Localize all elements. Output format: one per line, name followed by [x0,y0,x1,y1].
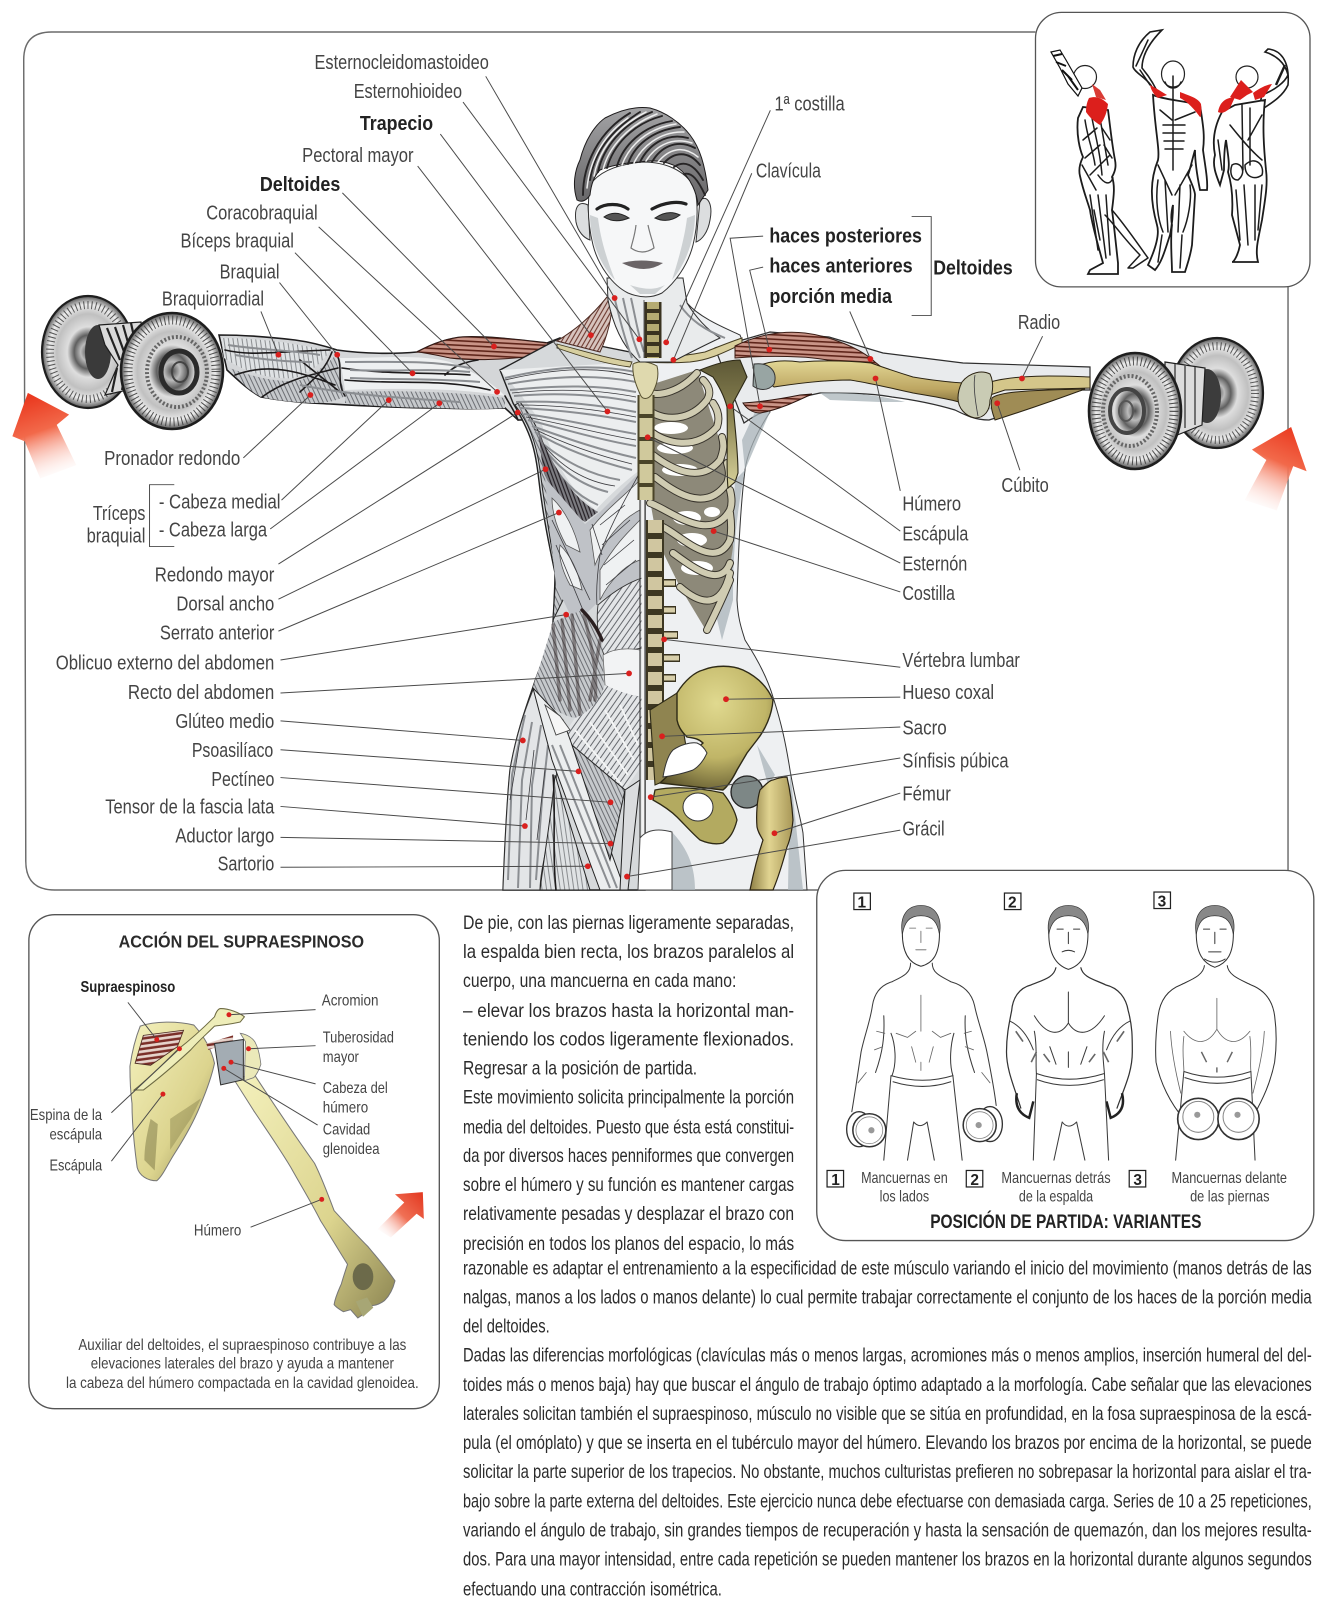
pectoral [500,362,640,510]
text block: exercise description: relativamente pesadas y desplazar el brazo con [463,1204,794,1225]
text block: exercise description: la espalda bien recta, los brazos paralelos al [463,942,794,963]
label: Tuberosidad mayor [246,1030,394,1066]
label: Pronador redondo: Pronador redondo [104,447,240,470]
skeleton: spine and sternum [633,362,680,780]
label: Dorsal ancho [176,466,548,616]
man 1: dumbbells at the sides [847,905,1002,1160]
text block: exercise description: Regresar a la posición de partida. [463,1059,697,1080]
skin of right torso and leg [640,280,807,890]
label: Supraespinoso [80,979,175,1042]
label: Esternón: Esternón [902,552,967,575]
label: Esternocleidomastoideo [315,51,618,301]
label: Esternón [645,434,967,575]
label: Cabeza larga: - Cabeza larga [159,518,268,541]
label: Bíceps braquial [180,230,415,376]
label: Cabeza medial: - Cabeza medial [159,490,280,513]
label: Grácil: Grácil [902,817,945,840]
panel: main anatomy frame [24,32,1288,890]
hair [574,107,708,205]
label: Pectoral mayor [302,144,610,414]
ears [576,198,711,242]
text block: exercise description: De pie, con las piernas ligeramente separadas, [463,913,794,934]
label: Recto del abdomen [128,671,632,704]
skeleton: ribcage [650,370,733,632]
text block: exercise description: – elevar los brazos hasta la horizontal man- [463,1001,794,1022]
label: Escápula [727,403,969,545]
label: Sartorio [218,852,591,875]
text block: exercise description: sobre el húmero y su función es mantener cargas [463,1175,794,1196]
label: Húmero [194,1197,324,1239]
label: Glúteo medio: Glúteo medio [175,710,274,733]
sartorius band [533,688,625,890]
label: Cabeza del húmero: húmero [323,1100,368,1117]
label: Glúteo medio [175,710,526,743]
inset figure: side view [1051,50,1148,274]
label: Fémur: Fémur [902,782,951,805]
label: haces posteriores [730,224,922,409]
number box 3 [1154,892,1170,910]
label: Escápula [50,1092,165,1174]
number box 1 [854,893,870,912]
number box 2: 2 [1008,895,1017,912]
legend 1: Mancuernas en los lados [827,1170,948,1205]
skeleton: femur [731,776,793,890]
label: Húmero [873,376,961,515]
label: Cavidad glenoidea [221,1066,380,1158]
heading: acción del supraespinoso: ACCIÓN DEL SUPRAESPINOSO [119,931,364,952]
dumbbell: left [42,296,223,429]
skin shadows [670,393,1040,890]
skeleton: pelvis [650,666,773,844]
label: Cabeza larga [159,400,442,541]
label: Aductor largo [175,825,613,848]
neck muscles and cervical spine [615,298,725,358]
label: Serrato anterior: Serrato anterior [160,621,274,644]
label: Espina de la escápula: Espina de la [30,1107,102,1124]
label: Deltoides bracket: Deltoides [933,256,1013,279]
panel: muscles involved inset [1036,12,1310,287]
skin of right arm [715,332,1090,423]
arrow: abduction direction [377,1192,424,1238]
label: Coracobraquial: Coracobraquial [206,202,318,225]
external oblique [533,610,604,718]
arrow: left lift direction [12,393,76,478]
label: haces anteriores: haces anteriores [769,254,913,277]
label: Espina de la escápula [30,1046,182,1144]
left arm muscles [219,335,600,420]
label: Oblicuo externo del abdomen: Oblicuo externo del abdomen [56,651,274,674]
caption: elevaciones laterales del brazo y ayuda a mantener [91,1355,395,1372]
label: Sínfisis púbica [648,749,1009,800]
legend 3: Mancuernas delante de las piernas [1129,1170,1287,1205]
number box 3: 3 [1158,893,1167,910]
label: Supraespinoso: Supraespinoso [80,979,175,996]
label: Redondo mayor [155,410,521,587]
lips [622,260,663,269]
rectus abdominis [597,578,642,655]
heading: posición de partida variantes: POSICIÓN DE PARTIDA: VARIANTES [930,1209,1201,1233]
text block: exercise description: da por diversos haces penniformes que convergen [463,1146,794,1167]
label: porción media: porción media [769,285,892,308]
dumbbell: right [1089,338,1263,469]
eyes [604,213,680,221]
dark lower pectoral edge [538,430,598,522]
label: Vértebra lumbar: Vértebra lumbar [902,649,1020,672]
labels: left column [56,51,642,875]
label: Costilla: Costilla [902,582,955,605]
label: Sínfisis púbica: Sínfisis púbica [902,749,1009,772]
arrow: right lift direction [1245,427,1307,510]
head [574,107,711,297]
label: Escápula: Escápula [50,1157,102,1174]
label: 1ª costilla: 1ª costilla [774,92,845,115]
label: Acromion: Acromion [322,992,378,1009]
serratus and upper abdomen [545,472,640,625]
label: Tríceps braquial bracket [87,485,174,547]
label: Deltoides: Deltoides [260,173,340,196]
white gap between the legs [638,830,672,890]
label: Deltoides bracket [912,217,1013,316]
text block: exercise description: media del deltoides. Puesto que ésta está constitui- [463,1117,794,1138]
label: Pectíneo: Pectíneo [211,768,274,791]
panel: acción del supraespinoso [29,915,439,1409]
text block: exercise description: del deltoides. [463,1316,550,1337]
man 3: dumbbells in front of legs [1156,905,1276,1160]
text block: exercise description: teniendo los codos ligeramente flexionados. [463,1030,794,1051]
label: Sacro [659,716,947,739]
label: Cúbito: Cúbito [1001,474,1049,497]
label: Psoasilíaco: Psoasilíaco [192,739,273,762]
lower deltoid fibres [743,394,812,413]
label: Pectoral mayor: Pectoral mayor [302,144,414,167]
legend 2: Mancuernas detrás de la espalda: de la espalda [1019,1188,1093,1205]
label: Braquial [220,260,340,358]
label: Esternohioideo [354,80,642,342]
label: Esternocleidomastoideo: Esternocleidomastoideo [315,51,489,74]
number box 2 [1004,893,1021,912]
label: Sartorio: Sartorio [218,852,274,875]
label: Serrato anterior [160,510,562,644]
label: Costilla [711,528,955,605]
adductors [572,745,625,860]
tensor fascia lata [503,690,557,890]
label: Cavidad glenoidea: Cavidad [323,1121,370,1138]
brows [597,202,686,209]
label: Cabeza medial [159,397,392,513]
lateral flank band [515,402,568,620]
label: 1ª costilla [663,92,845,345]
label: Aductor largo: Aductor largo [175,825,274,848]
labels: right column [624,92,1060,879]
label: Húmero: Húmero [902,492,961,515]
label: Esternohioideo: Esternohioideo [354,80,462,103]
label: Clavícula: Clavícula [756,159,821,182]
neck base muscles with trapezius [557,297,613,352]
label: Radio: Radio [1018,311,1060,334]
caption: la cabeza del húmero compactada en la cavidad glenoidea. [66,1375,419,1392]
skeleton: humerus [753,361,975,417]
left torso muscles [500,297,645,890]
face [588,162,697,297]
label: Cavidad glenoidea: glenoidea [323,1141,380,1158]
label: Tensor de la fascia lata [105,796,528,829]
label: Psoasilíaco [192,739,581,774]
label: Trapecio: Trapecio [360,112,433,135]
label: Hueso coxal [723,681,994,704]
label: Coracobraquial [206,202,500,395]
label: Tensor de la fascia lata: Tensor de la fascia lata [105,796,275,819]
nose [631,225,654,252]
number box 1: 1 [857,895,866,912]
label: Braquiorradial [162,287,281,358]
label: haces posteriores: haces posteriores [769,224,922,247]
label: Húmero: Húmero [194,1222,241,1239]
label: porción media [769,285,892,362]
rectus femoris [540,775,590,890]
label: Grácil [624,817,945,879]
skeleton: clavicles and scapula [557,338,747,488]
label: Trapecio [360,112,594,338]
label: Tríceps braquial bracket: braquial [87,524,145,547]
label: Oblicuo externo del abdomen [56,612,569,674]
label: Tuberosidad mayor: mayor [323,1049,359,1066]
label: Dorsal ancho: Dorsal ancho [176,593,274,616]
illustration: scapula and humerus [130,1009,395,1318]
inset figure: front view [1133,30,1207,272]
skeleton: radius and ulna [958,372,1090,420]
label: Hueso coxal: Hueso coxal [902,681,994,704]
label: Escápula: Escápula [902,522,969,545]
legend 1: Mancuernas en los lados: los lados [880,1188,929,1205]
text block: exercise description: efectuando una contracción isométrica. [463,1579,722,1600]
legend 1: Mancuernas en los lados: 1 [831,1172,840,1189]
label: Recto del abdomen: Recto del abdomen [128,681,274,704]
label: Vértebra lumbar [661,636,1020,672]
deltoid muscle on right arm [735,332,885,370]
legend 2: Mancuernas detrás de la espalda: Mancuernas detrás [1001,1170,1111,1187]
neck [607,278,720,362]
label: Deltoides [260,173,497,349]
caption: Auxiliar del deltoides, el supraespinoso contribuye a las [78,1337,406,1354]
label: Bíceps braquial: Bíceps braquial [180,230,294,253]
label: Sacro: Sacro [902,716,947,739]
legend 3: Mancuernas delante de las piernas: Mancuernas delante [1172,1170,1287,1187]
caption [66,1337,419,1392]
label: Pectíneo [211,768,613,805]
panel: posición de partida variantes [817,870,1314,1241]
label: Cabeza del húmero [229,1060,388,1117]
label: Tuberosidad mayor: Tuberosidad [323,1030,394,1047]
label: Fémur [772,782,951,836]
inset figure: back view [1214,49,1288,262]
man 2: dumbbells behind the back [1006,905,1132,1160]
label: Clavícula [671,159,821,363]
legend 3: Mancuernas delante de las piernas: de las piernas [1190,1188,1269,1205]
legend 1: Mancuernas en los lados: Mancuernas en [861,1170,948,1187]
label: Cabeza del húmero: Cabeza del [323,1080,388,1097]
label: Pronador redondo [104,392,313,470]
legend 2: Mancuernas detrás de la espalda: 2 [970,1172,979,1189]
figure: woman anatomy [219,107,1090,890]
text block: exercise description: cuerpo, una mancuerna en cada mano: [463,971,736,992]
label: Tríceps braquial bracket: Tríceps [93,502,145,525]
label: Radio [1018,311,1060,381]
lower abdominal region [563,685,642,790]
text block: exercise description: precisión en todos los planos del espacio, lo más [463,1234,794,1255]
label: Braquiorradial: Braquiorradial [162,287,264,310]
legend 2: Mancuernas detrás de la espalda [966,1170,1111,1205]
label: Cúbito [994,400,1049,497]
text block: exercise description: Este movimiento solicita principalmente la porción [463,1087,794,1108]
label: Braquial: Braquial [220,260,279,283]
label: Acromion [226,992,378,1017]
label: Espina de la escápula: escápula [50,1127,102,1144]
label: Redondo mayor: Redondo mayor [155,564,274,587]
text block: exercise description [463,913,1312,1600]
legend 3: Mancuernas delante de las piernas: 3 [1133,1172,1142,1189]
label: haces anteriores [750,254,913,352]
